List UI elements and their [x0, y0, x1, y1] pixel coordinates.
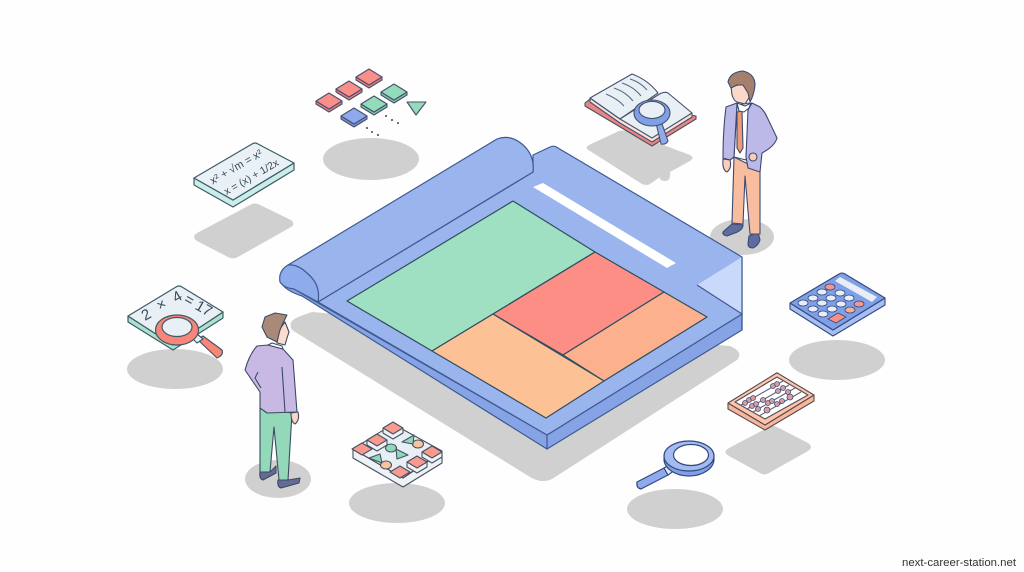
blue tile — [341, 108, 367, 127]
shoes — [260, 466, 300, 488]
jacket right — [746, 103, 777, 172]
rods — [741, 381, 801, 416]
equation result: = 17 — [181, 291, 215, 320]
page block — [590, 95, 692, 142]
right person — [723, 71, 777, 248]
shadow: blue magnifier — [627, 489, 723, 529]
red tile 1 — [316, 93, 342, 112]
fold edge — [697, 257, 742, 330]
rim top — [664, 441, 714, 471]
handle — [197, 336, 222, 358]
sleeve lines — [255, 367, 285, 412]
shadow: tiles — [323, 138, 419, 180]
formula line 2: x = (x) + 1/2x — [223, 157, 282, 198]
card top — [128, 286, 223, 345]
shadow: magnified card — [127, 349, 223, 389]
shadow: left person — [245, 460, 311, 498]
roll end cap — [280, 265, 319, 302]
card side — [194, 163, 294, 207]
treemap tile: right orange — [563, 292, 707, 381]
hand right — [749, 153, 757, 161]
hair — [728, 71, 755, 102]
icon: open book with magnifier — [585, 74, 696, 146]
rim — [664, 442, 714, 476]
equation text — [138, 288, 215, 324]
glass — [674, 444, 708, 466]
red magnifier — [156, 315, 222, 358]
jacket left — [723, 103, 737, 160]
icon: abacus — [728, 373, 814, 430]
shadow: formula card — [194, 204, 294, 258]
rim — [634, 100, 670, 126]
frame side — [728, 395, 814, 430]
icon: calculator — [790, 273, 885, 336]
frame top — [728, 373, 814, 425]
teal triangle — [407, 102, 426, 115]
handle — [656, 121, 668, 144]
teal circle — [386, 444, 396, 452]
icon: blue magnifier — [637, 441, 714, 489]
treemap tile: red — [493, 252, 664, 355]
beads — [742, 382, 793, 413]
blue magnifier — [634, 100, 670, 144]
green tile 2 — [381, 84, 407, 103]
sweater — [245, 345, 297, 413]
left page — [590, 74, 658, 119]
formula text — [208, 147, 282, 198]
calculator side — [790, 298, 885, 336]
hair — [262, 313, 287, 342]
trousers — [260, 408, 292, 480]
face — [731, 84, 750, 104]
hand left — [723, 159, 731, 172]
shadow: book — [587, 130, 692, 185]
orange circle — [412, 440, 424, 448]
shadow: abacus — [726, 426, 811, 474]
shoes — [723, 224, 760, 248]
screen — [835, 277, 877, 302]
orange circle lower — [380, 461, 392, 469]
left person — [245, 313, 300, 488]
book cover — [585, 99, 696, 146]
watermark: next-career-station.net — [902, 557, 1016, 569]
teal triangles — [369, 435, 414, 463]
formula line 1: x² + √m = x² — [208, 147, 265, 187]
red tile 3 — [356, 69, 382, 88]
front corner edge — [546, 435, 548, 449]
block top — [353, 424, 442, 478]
collar — [737, 103, 751, 112]
sheet top surface — [318, 146, 742, 435]
block body — [353, 449, 442, 487]
roll body — [288, 137, 533, 302]
frame opening — [735, 377, 808, 419]
treemap tile: green — [347, 201, 595, 351]
icon: shape puzzle block — [352, 422, 442, 487]
ground shadows — [127, 130, 885, 529]
tie — [737, 111, 743, 153]
white title bar — [533, 183, 676, 268]
red tile 2 — [336, 81, 362, 100]
collar — [268, 343, 283, 349]
icon: magnified math card — [128, 286, 223, 358]
main treemap sheet — [280, 137, 742, 449]
keys — [798, 284, 864, 323]
sheet front thickness — [280, 280, 742, 449]
right page — [620, 92, 692, 138]
shadow: puzzle — [349, 483, 445, 523]
equation four: 4 — [169, 288, 185, 306]
hand — [291, 412, 299, 424]
dots — [366, 115, 399, 136]
card side — [128, 312, 223, 350]
shadow: calculator — [789, 340, 885, 380]
shirt — [734, 103, 749, 160]
raised red squares — [352, 422, 442, 478]
ferrule — [664, 464, 675, 475]
equation left: 2 — [138, 306, 154, 324]
text lines — [606, 79, 647, 106]
icon: colored tiles — [316, 69, 426, 136]
treemap tile: large orange — [432, 314, 604, 418]
shadow: right person — [710, 219, 774, 255]
lens glass — [162, 318, 192, 336]
equation times: × — [153, 295, 170, 314]
trousers — [732, 157, 760, 234]
icon: formula card — [194, 143, 294, 207]
card top — [194, 143, 294, 200]
lens rim — [156, 315, 198, 345]
green tile 1 — [361, 96, 387, 115]
handle — [637, 468, 668, 489]
shadow: main sheet — [290, 312, 739, 481]
ferrule — [191, 334, 203, 343]
face — [277, 322, 289, 345]
glass — [639, 102, 665, 118]
folded corner — [697, 257, 742, 314]
calculator face — [790, 273, 885, 330]
